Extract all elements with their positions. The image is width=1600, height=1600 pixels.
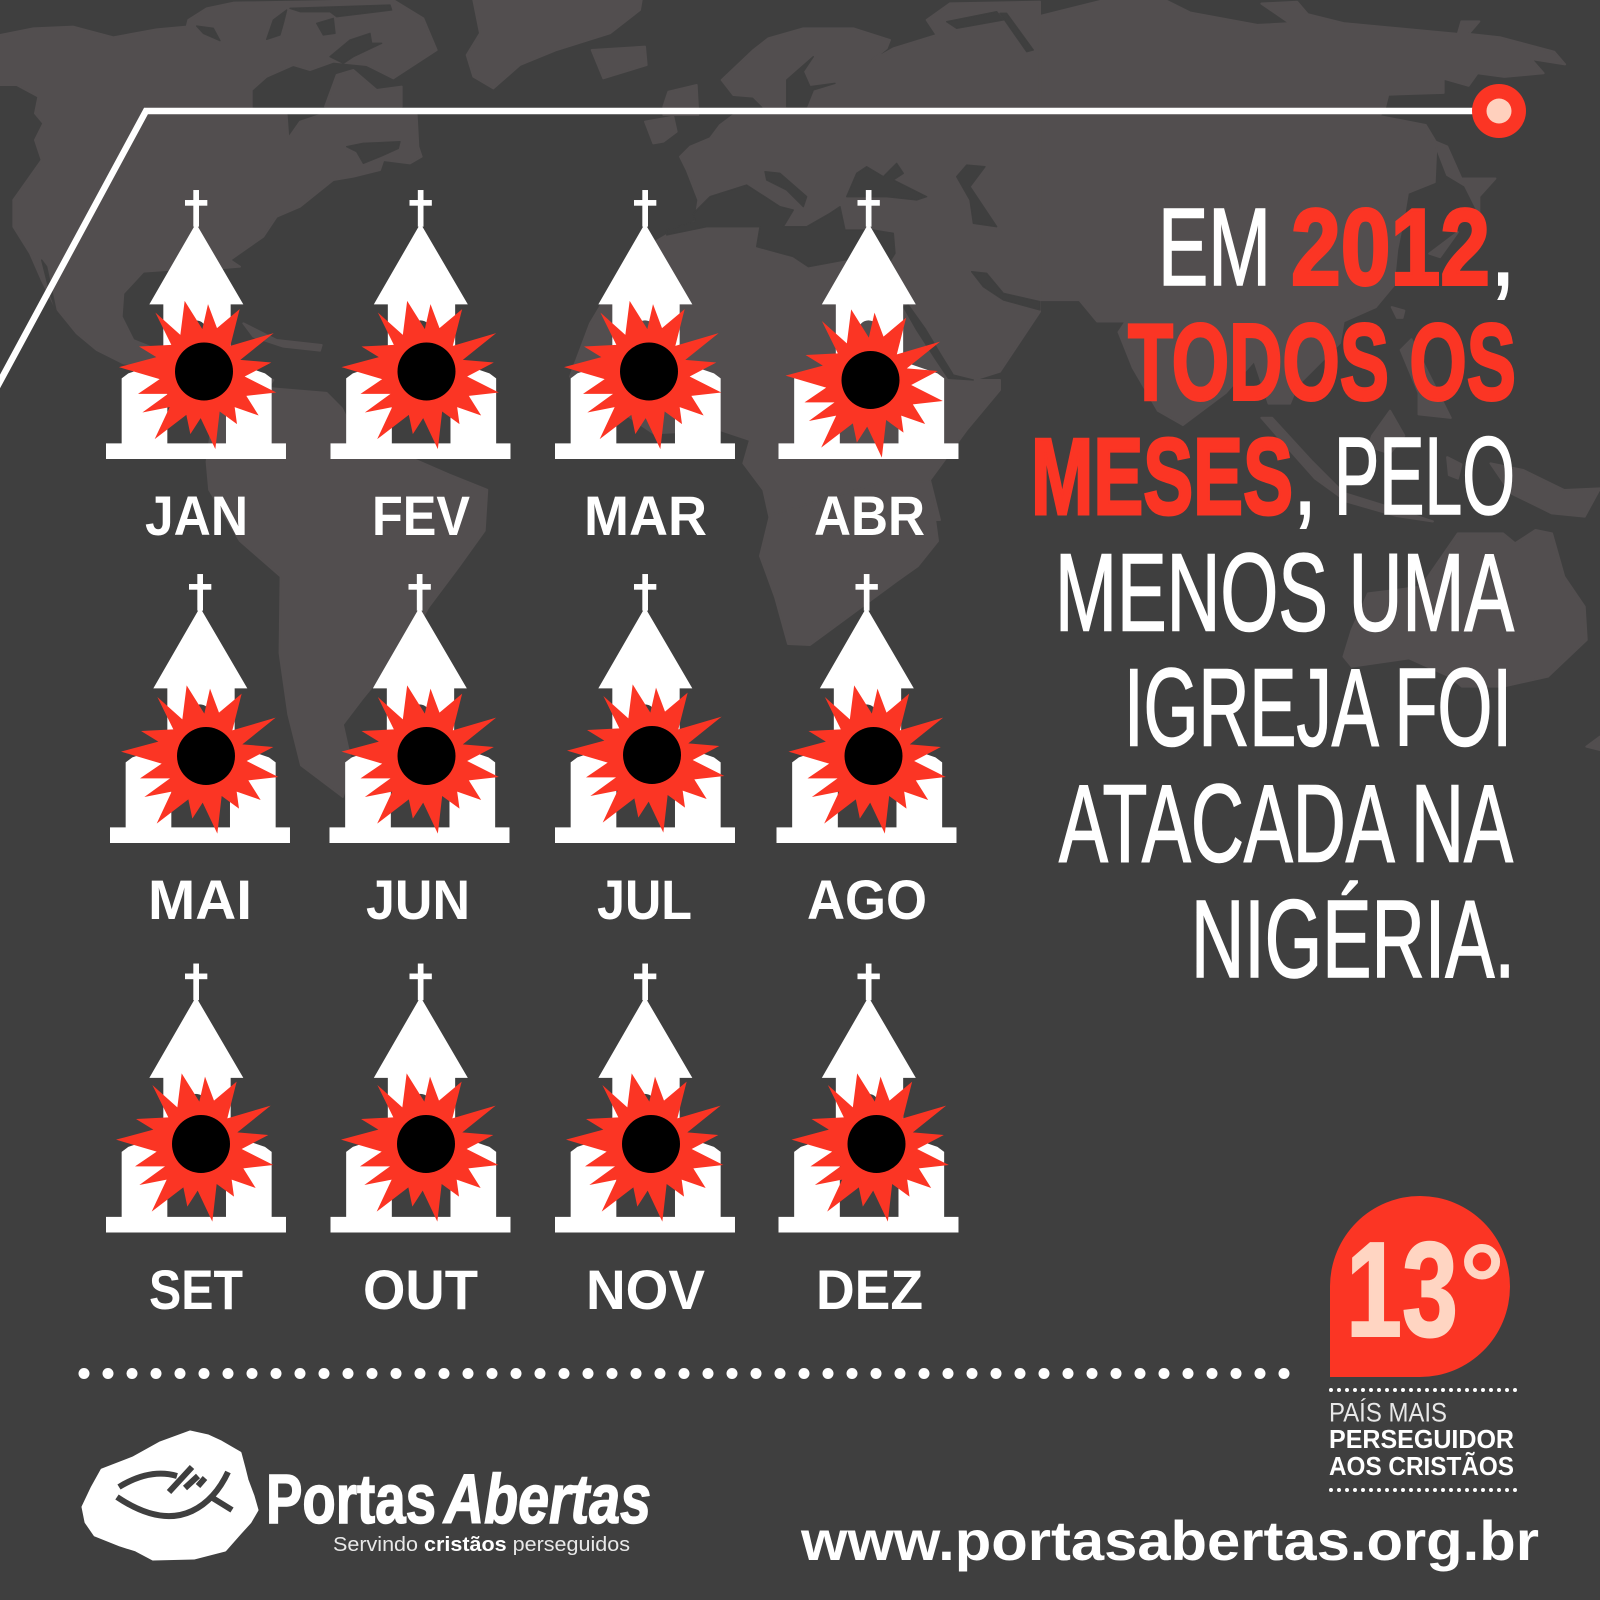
headline line 1: , [1490, 186, 1516, 309]
headline line 3: MESES [1031, 416, 1293, 538]
logo: Portas Abertas: Abertas [442, 1460, 651, 1538]
calendar: JUN [330, 574, 509, 931]
month label: ABR [814, 484, 925, 547]
calendar: MAI [110, 574, 290, 931]
headline line 1 [1158, 186, 1516, 309]
map: Australia and Papua [1344, 463, 1600, 750]
calendar: DEZ [778, 964, 958, 1321]
map: South America [207, 388, 487, 797]
church icon [778, 190, 958, 459]
headline line 1: EM [1158, 186, 1271, 309]
degree sign: ° [1459, 1221, 1505, 1349]
map: Europe and Africa [570, 2, 1040, 520]
calendar: MAR [555, 190, 735, 547]
tagline: Servindo cristãos perseguidos [333, 1534, 630, 1556]
website url: www.portasabertas.org.br [800, 1509, 1539, 1572]
month label: JAN [145, 484, 248, 547]
wordmark: Portas [266, 1460, 436, 1538]
explosion [564, 301, 721, 449]
month label: JUL [597, 868, 692, 931]
calendar: ABR [778, 190, 958, 547]
rank number: 13 [1346, 1214, 1458, 1365]
explosion [342, 685, 499, 834]
church icon [555, 574, 735, 843]
month label: MAI [148, 868, 252, 931]
calendar: NOV [555, 964, 735, 1321]
rank caption: PAÍS MAIS [1329, 1398, 1447, 1428]
church icon [778, 964, 958, 1232]
explosion [342, 301, 499, 449]
map: North America and Greenland [0, 0, 647, 400]
church icon [776, 574, 956, 843]
map: southern Africa [760, 480, 938, 645]
map: Eurasian seas [667, 12, 1040, 380]
month label: AGO [807, 868, 927, 931]
month label: FEV [372, 484, 470, 547]
church icon [106, 190, 286, 459]
teardrop [1330, 1196, 1510, 1377]
explosion [121, 685, 278, 834]
calendar: FEV [330, 190, 510, 547]
month label: OUT [363, 1258, 478, 1321]
month label: NOV [586, 1258, 705, 1321]
dotted divider [84, 1368, 1290, 1379]
church icon [330, 574, 509, 843]
icon: fish on stone [83, 1432, 257, 1559]
church icon [330, 190, 510, 459]
month label: SET [149, 1258, 243, 1321]
explosion [116, 1073, 273, 1222]
map pin marker [1472, 84, 1526, 138]
headline [1031, 186, 1516, 1001]
world map background [0, 0, 1600, 797]
explosion [786, 309, 943, 458]
rank badge [1330, 1196, 1510, 1377]
calendar: OUT [330, 964, 510, 1321]
logo: Portas Abertas [83, 1432, 651, 1559]
rank caption: PERSEGUIDOR [1329, 1424, 1514, 1454]
church icon [330, 964, 510, 1232]
church icon [110, 574, 290, 843]
calendar: SET [106, 964, 286, 1321]
month label: MAR [584, 484, 707, 547]
explosion [341, 1073, 498, 1222]
rank caption [1329, 1390, 1520, 1490]
explosion [789, 685, 946, 834]
connector line [0, 111, 1480, 387]
church icon [555, 190, 735, 459]
map: Asia [1040, 0, 1565, 521]
explosion [792, 1073, 949, 1222]
explosion [119, 301, 276, 449]
calendar: JAN [106, 190, 286, 547]
calendar: AGO [776, 574, 956, 931]
headline line 3: , [1293, 415, 1317, 538]
map: North American waters [42, 5, 400, 313]
rank caption: AOS CRISTÃOS [1329, 1451, 1514, 1481]
month label: JUN [366, 868, 470, 931]
headline line 1: 2012 [1291, 186, 1490, 308]
explosion [566, 1073, 723, 1222]
calendar: JUL [555, 574, 735, 931]
church icon [555, 964, 735, 1232]
explosion [567, 684, 724, 833]
month label: DEZ [816, 1258, 923, 1321]
church icon [106, 964, 286, 1232]
